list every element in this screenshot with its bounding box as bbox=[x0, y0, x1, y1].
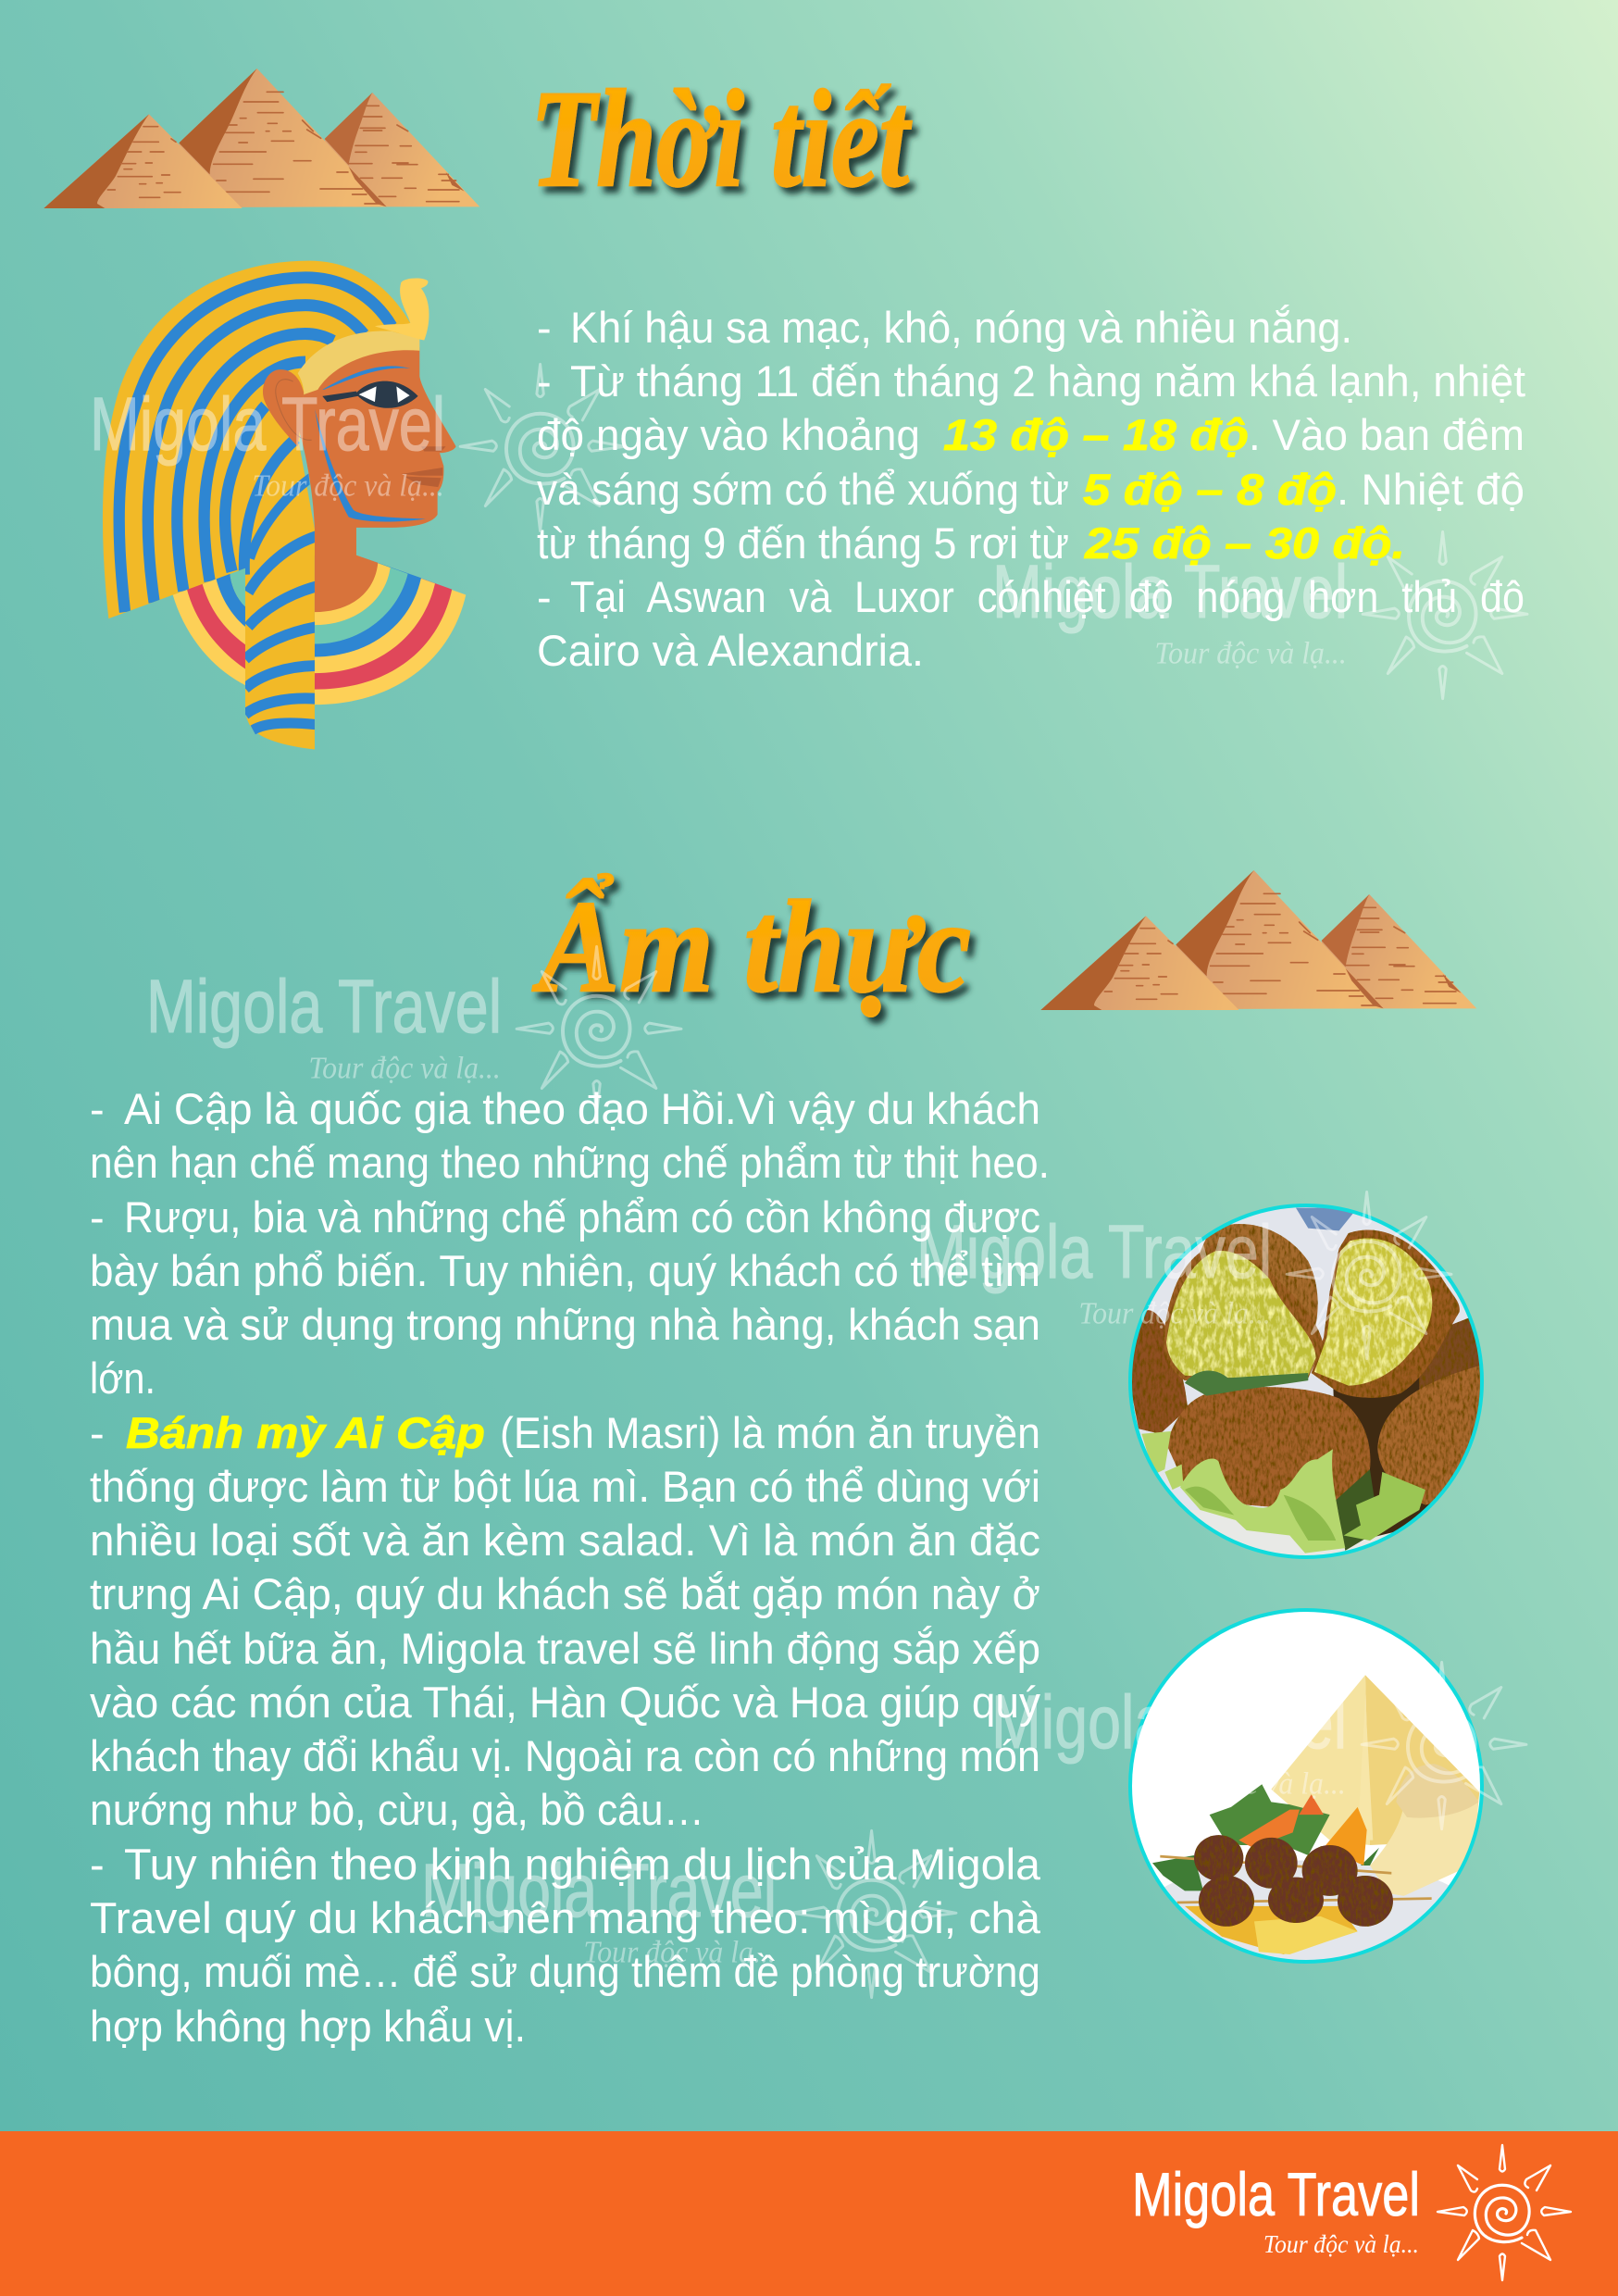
watermark 1: Tour độc và lạ... bbox=[252, 468, 444, 503]
text block: cuisine: (Eish Masri) là món ăn truyền bbox=[500, 1408, 1040, 1457]
watermark 4 bbox=[916, 1192, 1451, 1359]
text block: cuisine bbox=[90, 1084, 1050, 2051]
text block: weather: độ ngày vào khoảng bbox=[537, 410, 920, 459]
watermark 2: Migola Travel bbox=[992, 550, 1348, 634]
text block: weather: 13 độ – 18 độ bbox=[943, 410, 1249, 459]
text block: cuisine: hợp không hợp khẩu vị. bbox=[90, 2002, 526, 2051]
text block: cuisine: nướng như bò, cừu, gà, bồ câu… bbox=[90, 1785, 704, 1834]
icon: pyramids top left bbox=[44, 69, 479, 208]
text block: cuisine: nên hạn chế mang theo những chế phẩm từ thịt heo. bbox=[90, 1138, 1050, 1187]
text block: cuisine: mua và sử dụng trong những nhà hàng, khách sạn bbox=[90, 1300, 1040, 1349]
illustration: pharaoh head bbox=[103, 261, 466, 750]
icon: pyramids right bbox=[1040, 870, 1476, 1010]
watermark 4: Migola Travel bbox=[916, 1210, 1272, 1294]
text block: cuisine: - bbox=[90, 1840, 105, 1889]
text block: weather: Từ tháng 11 đến tháng 2 hàng năm khá lạnh, nhiệt bbox=[570, 356, 1525, 406]
text block: weather: - bbox=[537, 356, 552, 406]
text block: cuisine: Bánh mỳ Ai Cập bbox=[126, 1408, 485, 1457]
text block: cuisine: Rượu, bia và những chế phẩm có cồn không được bbox=[124, 1192, 1040, 1242]
text block: weather: Cairo và Alexandria. bbox=[537, 626, 924, 675]
text block: cuisine: nhiều loại sốt và ăn kèm salad. Vì là món ăn đặc bbox=[90, 1516, 1040, 1565]
text block: cuisine: hầu hết bữa ăn, Migola travel sẽ linh động sắp xếp bbox=[90, 1624, 1040, 1673]
watermark 5: Migola Travel bbox=[991, 1680, 1347, 1765]
text block: weather: từ tháng 9 đến tháng 5 rơi từ bbox=[537, 518, 1069, 568]
photo: falafel bbox=[1126, 1200, 1484, 1561]
text block: cuisine: thống được làm từ bột lúa mì. Bạn có thể dùng với bbox=[90, 1462, 1040, 1511]
text block: weather: - bbox=[537, 303, 552, 352]
watermark 3: Tour độc và lạ... bbox=[308, 1051, 501, 1085]
text block: weather: và sáng sớm có thể xuống từ bbox=[537, 465, 1069, 514]
text block: cuisine: khách thay đổi khẩu vị. Ngoài ra còn có những món bbox=[90, 1731, 1040, 1780]
title: Ẩm thực: Ẩm thực bbox=[532, 873, 971, 1019]
watermark 5 bbox=[991, 1662, 1526, 1829]
text block: weather: Khí hậu sa mạc, khô, nóng và nhiều nắng. bbox=[570, 303, 1352, 352]
text block: weather bbox=[537, 303, 1525, 675]
text block: weather: Tại Aswan và Luxor cónhiệt độ nóng hơn thủ đô bbox=[570, 572, 1525, 621]
text block: weather: - bbox=[537, 572, 552, 621]
watermark 3 bbox=[146, 946, 681, 1114]
watermark 6: Tour độc và lạ... bbox=[583, 1935, 776, 1969]
text block: cuisine: trưng Ai Cập, quý du khách sẽ bắt gặp món này ở bbox=[90, 1569, 1040, 1618]
watermark 2: Tour độc và lạ... bbox=[1154, 636, 1347, 670]
text block: cuisine: Travel quý du khách nên mang theo: mì gói, chà bbox=[90, 1893, 1041, 1942]
watermark 1 bbox=[90, 364, 625, 531]
footer bar bbox=[0, 2131, 1618, 2296]
text block: cuisine: - bbox=[90, 1192, 105, 1242]
photo: kofta with pyramid bbox=[1128, 1609, 1484, 1965]
watermark 3: Migola Travel bbox=[146, 965, 502, 1049]
text block: weather: . Vào ban đêm bbox=[1249, 410, 1525, 459]
footer logo bbox=[1132, 2145, 1571, 2280]
text block: cuisine: - bbox=[90, 1408, 105, 1457]
watermark 6 bbox=[421, 1830, 956, 1998]
watermark 2 bbox=[992, 531, 1527, 699]
title: Thời tiết: Thời tiết bbox=[530, 62, 912, 216]
watermark 1: Migola Travel bbox=[90, 382, 445, 467]
text block: cuisine: bày bán phổ biến. Tuy nhiên, quý khách có thể tìm bbox=[90, 1246, 1040, 1295]
footer logo: Migola Travel bbox=[1132, 2160, 1420, 2228]
text block: weather: 5 độ – 8 độ bbox=[1083, 465, 1337, 514]
text block: cuisine: lớn. bbox=[90, 1354, 156, 1403]
text block: cuisine: vào các món của Thái, Hàn Quốc và Hoa giúp quý bbox=[90, 1678, 1040, 1727]
watermark 4: Tour độc và lạ... bbox=[1078, 1296, 1271, 1330]
text block: weather: 25 độ – 30 độ. bbox=[1084, 518, 1405, 568]
footer logo: Tour độc và lạ... bbox=[1263, 2230, 1419, 2258]
watermark 6: Migola Travel bbox=[421, 1849, 777, 1933]
text block: weather: . Nhiệt độ bbox=[1337, 465, 1525, 514]
watermark 5: Tour độc và lạ... bbox=[1153, 1766, 1346, 1801]
text block: cuisine: Ai Cập là quốc gia theo đạo Hồi.Vì vậy du khách bbox=[124, 1084, 1040, 1133]
text block: cuisine: - bbox=[90, 1084, 105, 1133]
text block: cuisine: bông, muối mè… để sử dụng thêm đề phòng trường bbox=[90, 1947, 1040, 1996]
text block: cuisine: Tuy nhiên theo kinh nghiệm du lịch của Migola bbox=[124, 1840, 1041, 1889]
